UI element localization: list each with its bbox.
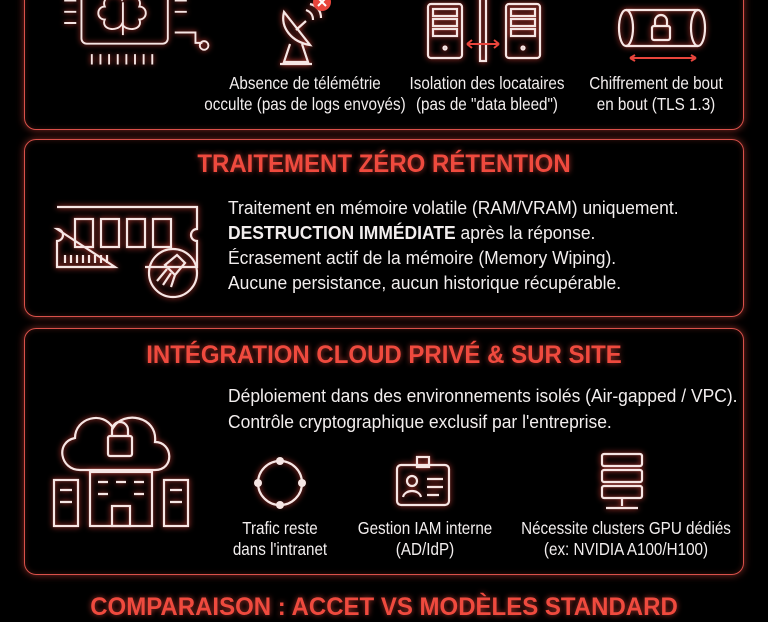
panel: private cloud <box>24 328 744 575</box>
text: zero retention details: Traitement en mémoire volatile (RAM/VRAM) uniquement. <box>228 198 679 218</box>
icon: brain chip <box>61 0 214 68</box>
heading: zero retention: TRAITEMENT ZÉRO RÉTENTION <box>197 150 571 178</box>
heading: comparison (clipped): COMPARAISON : ACCET VS MODÈLES STANDARD <box>90 593 678 621</box>
caption: isolation <box>410 73 564 114</box>
icon: intranet cycle <box>252 455 308 511</box>
icon: encrypted cylinder <box>613 4 711 62</box>
caption: encryption: en bout (TLS 1.3) <box>597 94 715 114</box>
text: zero retention details: Aucune persistance, aucun historique récupérable. <box>228 273 621 293</box>
caption: GPU: (ex: NVIDIA A100/H100) <box>544 539 708 559</box>
caption: intranet: Trafic reste <box>242 518 318 538</box>
text: zero retention details: Écrasement actif de la mémoire (Memory Wiping). <box>228 248 616 268</box>
text: private cloud details: Contrôle cryptographique exclusif par l'entreprise. <box>228 412 612 432</box>
text: private cloud details <box>228 386 738 432</box>
caption: telemetry: occulte (pas de logs envoyés) <box>204 94 406 114</box>
text: private cloud details: Déploiement dans des environnements isolés (Air-gapped / VPC). <box>228 386 738 406</box>
caption: isolation: Isolation des locataires <box>410 73 564 93</box>
caption: GPU: Nécessite clusters GPU dédiés <box>521 518 731 538</box>
caption: IAM <box>358 518 492 559</box>
icon: GPU servers <box>596 448 648 514</box>
panel: zero retention <box>24 139 744 317</box>
icon: tenant isolation servers <box>422 0 546 67</box>
caption: telemetry <box>204 73 406 114</box>
caption: IAM: Gestion IAM interne <box>358 518 492 538</box>
text: zero retention details <box>228 198 679 293</box>
caption: GPU <box>521 518 731 559</box>
heading: private cloud: INTÉGRATION CLOUD PRIVÉ & SUR SITE <box>146 341 622 369</box>
caption: intranet: dans l'intranet <box>233 539 327 559</box>
caption: IAM: (AD/IdP) <box>396 539 454 559</box>
icon: satellite no telemetry <box>276 0 331 70</box>
caption: intranet <box>233 518 327 559</box>
caption: encryption <box>589 73 723 114</box>
caption: encryption: Chiffrement de bout <box>589 73 723 93</box>
text: zero retention details: DESTRUCTION IMMÉDIATE après la réponse. <box>228 223 595 243</box>
caption: telemetry: Absence de télémétrie <box>229 73 381 93</box>
caption: isolation: (pas de "data bleed") <box>416 94 558 114</box>
icon: memory wipe <box>51 201 203 303</box>
panel: security features <box>24 0 744 130</box>
icon: ID card <box>391 451 455 511</box>
icon: cloud buildings <box>48 412 194 532</box>
